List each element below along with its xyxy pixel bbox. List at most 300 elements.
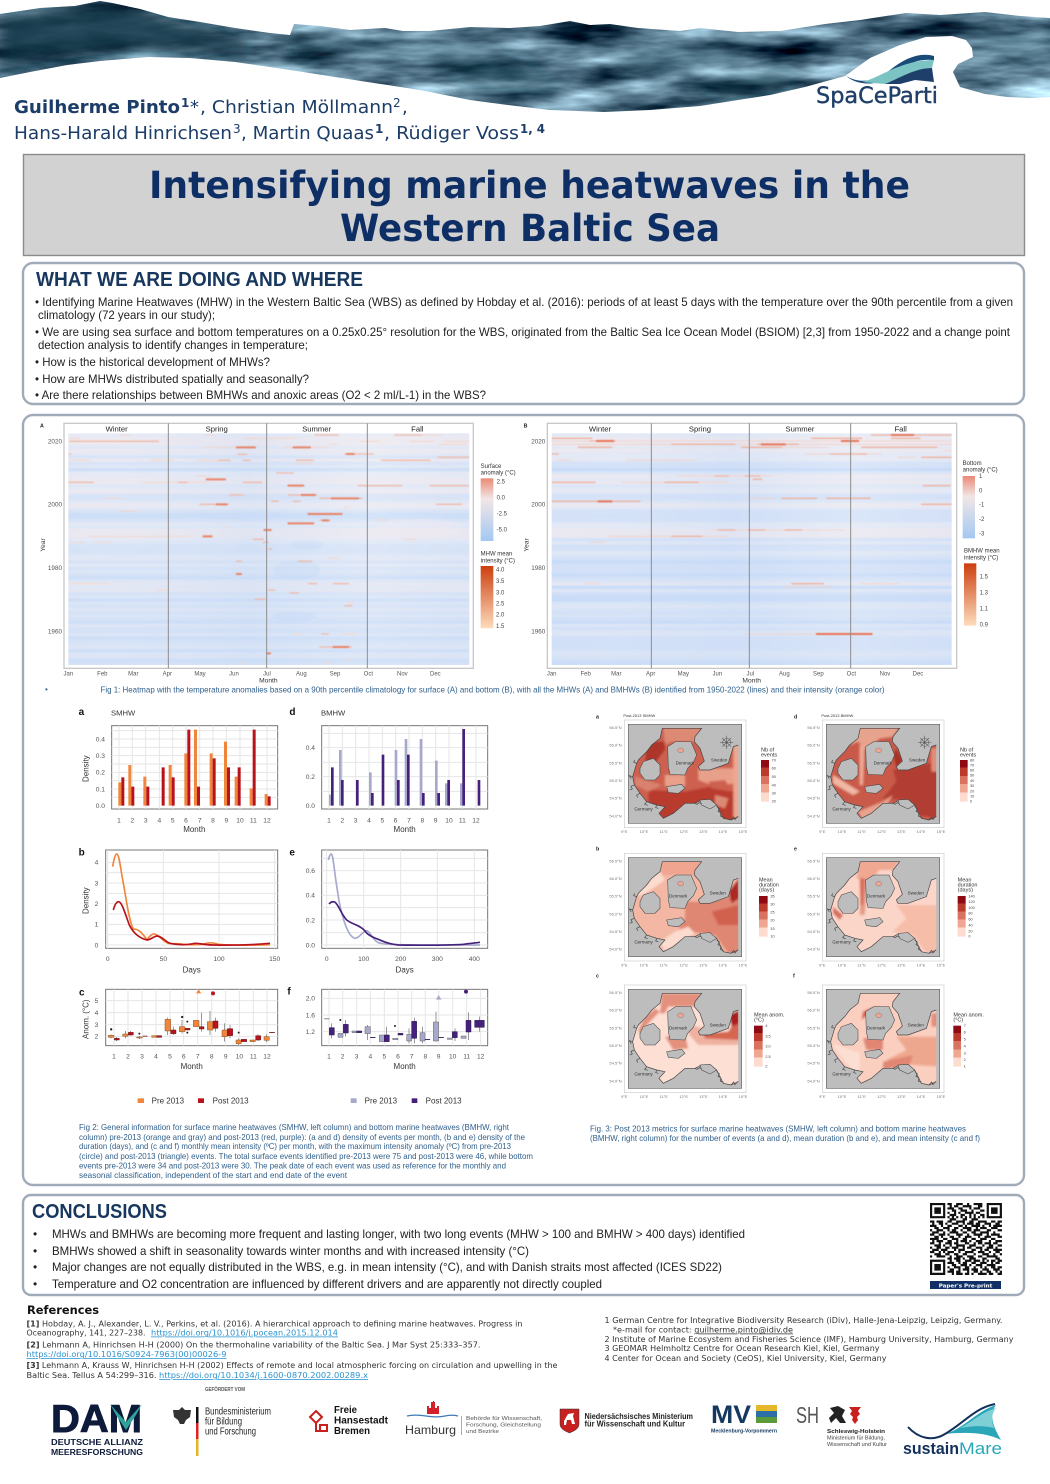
- chart d: BMHW monthly density: 12: [472, 817, 480, 824]
- chart e: BMHW duration density: e: [289, 847, 295, 858]
- map f: BMHW mean anomaly: 13°E: [897, 1094, 906, 1099]
- authors: [14, 96, 545, 144]
- chart e: BMHW duration density: 200: [395, 956, 407, 963]
- map a: SMHW number of events: 70: [772, 758, 776, 762]
- logo: Schleswig-Holstein: Ministerium für Bildung,: [827, 1436, 885, 1442]
- map f: BMHW mean anomaly: 4: [964, 1044, 967, 1048]
- chart b: SMHW duration density: 50: [160, 956, 167, 963]
- map b: SMHW mean duration: 56.0°N: [609, 876, 622, 881]
- chart a: SMHW monthly density: 5: [171, 817, 175, 824]
- chart a: SMHW monthly density: a: [79, 707, 85, 718]
- map f: BMHW mean anomaly: 10°E: [838, 1094, 847, 1099]
- logo: Niedersachsen: für Wissenschaft und Kultur: [584, 1418, 686, 1428]
- chart c: SMHW intensity boxplot: Month: [181, 1062, 203, 1071]
- heatmap B: bottom: Oct: [847, 671, 856, 677]
- heading: conclusions: CONCLUSIONS: [32, 1201, 167, 1223]
- map c: SMHW mean anomaly: [596, 973, 785, 1099]
- legend: surface anomaly: anomaly (°C): [481, 471, 516, 477]
- chart f: BMHW intensity boxplot: Month: [394, 1062, 416, 1071]
- legend: SMHW periods: Pre 2013: [152, 1096, 185, 1105]
- chart f: BMHW intensity boxplot: 10: [449, 1053, 457, 1060]
- text block: conclusions list: BMHWs showed a shift in seasonality towards winter months and with increased intensity (°C): [52, 1244, 529, 1258]
- heatmap A: surface: 2020: [48, 438, 62, 445]
- text block: aims: [35, 295, 1013, 402]
- chart d: BMHW monthly density: 8: [420, 817, 424, 824]
- logo: Niedersachsen: Niedersächsisches Ministerium: [584, 1411, 693, 1421]
- chart a: SMHW monthly density: 0.4: [96, 736, 105, 743]
- text block: conclusions list: •: [33, 1277, 37, 1291]
- references: References: [27, 1303, 99, 1317]
- map b: SMHW mean duration: 56.5°N: [609, 858, 622, 863]
- authors: , Rüdiger Voss: [384, 123, 519, 144]
- heatmap B: bottom: Jun: [713, 671, 722, 677]
- legend: bottom anomaly: 1: [979, 474, 983, 480]
- map e: BMHW mean duration: 56.5°N: [807, 858, 820, 863]
- heatmap B: bottom: Mar: [611, 671, 621, 677]
- logo: SpaCeParti: [816, 55, 938, 109]
- chart c: SMHW intensity boxplot: 4: [95, 1010, 99, 1017]
- affiliations: [604, 1316, 1014, 1363]
- chart e: BMHW duration density: 0.2: [306, 917, 315, 924]
- map c: SMHW mean anomaly: 3.5: [765, 1035, 771, 1039]
- map d: BMHW number of events: 80: [970, 758, 974, 762]
- heatmap B: bottom: Winter: [589, 424, 612, 433]
- affiliations: 3 GEOMAR Helmholtz Centre for Ocean Research Kiel, Kiel, Germany: [604, 1344, 880, 1353]
- map b: SMHW mean duration: 10: [770, 935, 775, 939]
- heatmap A: surface: Sep: [330, 671, 341, 677]
- QR code: [930, 1203, 1002, 1275]
- heatmap A: surface: Summer: [302, 424, 332, 433]
- authors: , Martin Quaas: [241, 123, 374, 144]
- authors: , Christian Möllmann: [200, 97, 393, 118]
- chart f: BMHW intensity boxplot: 1.6: [306, 1012, 315, 1019]
- heatmap A: surface: Apr: [163, 671, 172, 677]
- chart e: BMHW duration density: 100: [358, 956, 370, 963]
- map b: SMHW mean duration: 12°E: [679, 962, 688, 967]
- map f: BMHW mean anomaly: 5: [964, 1038, 966, 1042]
- map b: SMHW mean duration: duration: [759, 882, 779, 888]
- map b: SMHW mean duration: 55.0°N: [609, 911, 622, 916]
- legend: BMHW mean intensity: 1.3: [980, 590, 989, 596]
- chart d: BMHW monthly density: 10: [445, 817, 453, 824]
- map a: SMHW number of events: 15°E: [739, 829, 748, 834]
- map b: SMHW mean duration: b: [596, 847, 600, 853]
- heatmap A: surface: [40, 423, 516, 685]
- map a: SMHW number of events: Nb of: [761, 747, 775, 753]
- chart d: BMHW monthly density: 2: [340, 817, 344, 824]
- map d: BMHW number of events: 40: [970, 779, 974, 783]
- map f: BMHW mean anomaly: 7: [964, 1024, 966, 1028]
- map b: SMHW mean duration: 10°E: [640, 962, 649, 967]
- map b: SMHW mean duration: 54.5°N: [609, 929, 622, 934]
- chart b: SMHW duration density: Days: [183, 965, 201, 974]
- chart f: BMHW intensity boxplot: 11: [463, 1053, 470, 1060]
- map f: BMHW mean anomaly: 14°E: [917, 1094, 926, 1099]
- heatmap A: surface: 1960: [48, 628, 62, 635]
- references: Oceanography, 141, 227–238.: [26, 1328, 146, 1338]
- map e: BMHW mean duration: (days): [958, 887, 973, 893]
- map e: BMHW mean duration: 11°E: [857, 962, 866, 967]
- map b: SMHW mean duration: 9°E: [621, 962, 628, 967]
- logo: Bundesministerium: [173, 1406, 271, 1456]
- chart f: BMHW intensity boxplot: 9: [437, 1053, 441, 1060]
- logo: sustainMare: sustain: [903, 1439, 959, 1458]
- map d: BMHW number of events: 20: [970, 789, 974, 793]
- logo: Freie Hansestadt Bremen: Hansestadt: [334, 1414, 388, 1426]
- legend: BMHW mean intensity: BMHW mean: [964, 549, 1000, 555]
- map e: BMHW mean duration: 100: [968, 906, 975, 910]
- logo: Schleswig-Holstein: Wissenschaft und Kultur: [827, 1442, 887, 1448]
- authors: Hans-Harald Hinrichsen: [14, 123, 232, 144]
- logo: sustainMare: [903, 1404, 1002, 1458]
- map b: SMHW mean duration: (days): [759, 887, 774, 893]
- map b: SMHW mean duration: Sweden: [710, 891, 726, 896]
- logo: Schleswig-Holstein: Schleswig-Holstein: [827, 1429, 885, 1435]
- map f: BMHW mean anomaly: Denmark: [867, 1025, 886, 1030]
- legend: SMHW periods: Post 2013: [213, 1096, 249, 1105]
- chart a: SMHW monthly density: 10: [236, 817, 244, 824]
- map b: SMHW mean duration: 14°E: [719, 962, 728, 967]
- logo: Hamburg: [405, 1401, 542, 1437]
- heatmap B: bottom: May: [678, 671, 689, 677]
- chart d: BMHW monthly density: 4: [367, 817, 371, 824]
- legend: BMHW mean intensity: 0.9: [980, 622, 989, 628]
- chart a: SMHW monthly density: 0.2: [96, 770, 105, 777]
- references: https://doi.org/10.1016/j.pocean.2015.12.014: [151, 1328, 338, 1338]
- heatmap A: surface: Nov: [397, 671, 408, 677]
- map e: BMHW mean duration: [794, 847, 977, 967]
- chart a: SMHW monthly density: 4: [157, 817, 161, 824]
- chart c: SMHW intensity boxplot: 7: [196, 1053, 200, 1060]
- map b: SMHW mean duration: 15°E: [739, 962, 748, 967]
- heatmap B: bottom: Apr: [646, 671, 655, 677]
- heatmap A: surface: 1980: [48, 565, 62, 572]
- map a: SMHW number of events: 40: [772, 783, 776, 787]
- map f: BMHW mean anomaly: 15°E: [937, 1094, 946, 1099]
- heatmap A: surface: Oct: [364, 671, 373, 677]
- map a: SMHW number of events: 55.0°N: [609, 778, 622, 783]
- map e: BMHW mean duration: Sweden: [908, 891, 924, 896]
- text block: conclusions list: MHWs and BMHWs are becoming more frequent and lasting longer, with two long events (MHW > 100 and BMHW > 400 days) identified: [52, 1227, 745, 1241]
- map a: SMHW number of events: Post-2013 SMHW: [623, 713, 655, 718]
- map f: BMHW mean anomaly: 6: [964, 1031, 966, 1035]
- logo: SpaCeParti: SpaCeParti: [816, 84, 938, 109]
- panel: what we are doing and where: [23, 263, 1024, 404]
- chart d: BMHW monthly density: 6: [394, 817, 398, 824]
- chart b: SMHW duration density: 100: [213, 956, 225, 963]
- references: https://doi.org/10.1034/j.1600-0870.2002.00289.x: [159, 1371, 369, 1380]
- MHW event streaks: [68, 435, 470, 663]
- chart a: SMHW monthly density: 0.3: [96, 753, 105, 760]
- heatmap A: surface: May: [194, 671, 206, 677]
- map f: BMHW mean anomaly: 11°E: [857, 1094, 866, 1099]
- map b: SMHW mean duration: 25: [770, 911, 775, 915]
- map a: SMHW number of events: a: [596, 714, 599, 720]
- logo: DAM: MEERESFORSCHUNG: [51, 1447, 143, 1457]
- map a: SMHW number of events: [596, 713, 777, 834]
- chart c: SMHW intensity boxplot: 2: [95, 1034, 99, 1041]
- chart d: BMHW monthly density: 9: [434, 817, 438, 824]
- chart c: SMHW intensity boxplot: 1: [112, 1053, 116, 1060]
- heatmap B: bottom: 1960: [531, 628, 546, 635]
- chart b: SMHW duration density: 2: [95, 901, 99, 908]
- map e: BMHW mean duration: 140: [968, 894, 975, 898]
- text block: aims: • We are using sea surface and bottom temperatures on a 0.25x0.25° resolution for the WBS, originated from the Baltic Sea Ice Ocean Model (BSIOM) [2,3] from 1950-2022 and a change point: [35, 325, 1011, 339]
- chart f: BMHW intensity boxplot: 2: [341, 1053, 345, 1060]
- map d: BMHW number of events: 70: [970, 763, 974, 767]
- references: https://doi.org/10.1016/S0924-7963(00)00026-9: [26, 1350, 227, 1359]
- legend: surface anomaly: 0.0: [497, 496, 506, 502]
- heatmap B: bottom: Month: [742, 678, 761, 685]
- heatmap A: surface: 2000: [48, 502, 62, 509]
- chart a: SMHW monthly density: SMHW: [111, 708, 136, 717]
- chart d: BMHW monthly density: BMHW: [321, 708, 346, 717]
- map e: BMHW mean duration: 13°E: [897, 962, 906, 967]
- chart a: SMHW monthly density: 8: [211, 817, 215, 824]
- map e: BMHW mean duration: 56.0°N: [807, 876, 820, 881]
- chart b: SMHW duration density: 4: [95, 860, 99, 867]
- authors: ,: [402, 97, 408, 118]
- legend: bottom anomaly: -2: [979, 517, 985, 523]
- map b: SMHW mean duration: 15: [770, 927, 775, 931]
- figure 2 caption: [79, 1123, 533, 1180]
- legend: BMHW mean intensity: intensity (°C): [964, 556, 998, 562]
- chart f: BMHW intensity boxplot: 7: [410, 1053, 414, 1060]
- heatmap A: surface: Jul: [263, 671, 271, 677]
- chart b: SMHW duration density: 1: [95, 922, 99, 929]
- chart a: SMHW monthly density: 6: [184, 817, 188, 824]
- map a: SMHW number of events: 56.0°N: [609, 743, 622, 748]
- map a: SMHW number of events: events: [761, 752, 777, 758]
- legend: BMHW periods: [351, 1096, 462, 1105]
- map e: BMHW mean duration: Germany: [832, 940, 852, 945]
- logo: Schleswig-Holstein: [796, 1402, 887, 1448]
- map f: BMHW mean anomaly: (°C): [953, 1017, 963, 1023]
- chart f: BMHW intensity boxplot: 6: [396, 1053, 400, 1060]
- header wave image: [0, 0, 1050, 115]
- map f: BMHW mean anomaly: 54.0°N: [807, 1078, 820, 1083]
- map d: BMHW number of events: 30: [970, 784, 974, 788]
- map a: SMHW number of events: 54.5°N: [609, 796, 622, 801]
- figure 2 caption: Fig 2: General information for surface marine heatwaves (SMHW, left column) and bottom marine heatwaves (BMHW, right: [79, 1123, 510, 1132]
- logo: Schleswig-Holstein: SH: [796, 1402, 819, 1428]
- map c: SMHW mean anomaly: (°C): [754, 1017, 764, 1023]
- authors: 1: [181, 96, 189, 110]
- chart b: SMHW duration density: 0: [106, 956, 110, 963]
- chart f: BMHW intensity boxplot: 8: [423, 1053, 427, 1060]
- map c: SMHW mean anomaly: 10°E: [640, 1094, 649, 1099]
- figure 2 caption: duration (days), and (c and f) monthly mean intensity (ºC) per month, with the maximum intensity anomaly (ºC) from pre-2013: [79, 1142, 511, 1151]
- chart e: BMHW duration density: 300: [432, 956, 443, 963]
- logo: Bundesministerium: und Forschung: [205, 1426, 256, 1438]
- chart a: SMHW monthly density: 1: [117, 817, 121, 824]
- map e: BMHW mean duration: 14°E: [917, 962, 926, 967]
- logo: Bundesministerium: für Bildung: [205, 1416, 242, 1428]
- map a: SMHW number of events: 20: [772, 800, 776, 804]
- map c: SMHW mean anomaly: Mean anom.: [754, 1012, 785, 1018]
- chart c: SMHW intensity boxplot: 3: [140, 1053, 144, 1060]
- chart f: BMHW intensity boxplot: 12: [477, 1053, 485, 1060]
- heatmap B: bottom: Spring: [689, 424, 711, 433]
- legend: BMHW periods: Post 2013: [426, 1096, 462, 1105]
- map d: BMHW number of events: 54.5°N: [807, 796, 820, 801]
- heatmap B: bottom: Feb: [581, 671, 591, 677]
- map c: SMHW mean anomaly: 2: [765, 1065, 767, 1069]
- map c: SMHW mean anomaly: 55.5°N: [609, 1025, 622, 1030]
- map c: SMHW mean anomaly: Germany: [634, 1071, 654, 1076]
- button: paper's pre-print: [930, 1281, 1001, 1289]
- logo: Freie Hansestadt Bremen: Freie: [334, 1404, 357, 1416]
- figure 2 caption: seasonal classification, independent of the start and end date of the event: [79, 1171, 348, 1180]
- chart c: SMHW intensity boxplot: 2: [126, 1053, 130, 1060]
- map d: BMHW number of events: 15°E: [937, 829, 946, 834]
- map c: SMHW mean anomaly: 4: [765, 1024, 768, 1028]
- text block: aims: • Are there relationships between BMHWs and anoxic areas (O2 < 2 ml/L-1) in the WBS?: [35, 388, 486, 402]
- map e: BMHW mean duration: 10°E: [838, 962, 847, 967]
- map d: BMHW number of events: 13°E: [897, 829, 906, 834]
- chart b: SMHW duration density: 0: [95, 942, 99, 949]
- legend: BMHW periods: Pre 2013: [365, 1096, 398, 1105]
- legend: surface anomaly: 2.5: [497, 480, 506, 486]
- legend: MHW mean intensity: intensity (°C): [481, 558, 515, 564]
- heading: what we are doing: WHAT WE ARE DOING AND WHERE: [36, 269, 363, 291]
- map c: SMHW mean anomaly: 13°E: [699, 1094, 708, 1099]
- chart e: BMHW duration density: 0.4: [306, 893, 315, 900]
- map e: BMHW mean duration: 54.0°N: [807, 947, 820, 952]
- map f: BMHW mean anomaly: 12°E: [877, 1094, 886, 1099]
- chart a: SMHW monthly density: Month: [183, 825, 205, 834]
- legend: MHW mean intensity: 1.5: [496, 624, 505, 630]
- references: [3] Lehmann A, Krauss W, Hinrichsen H-H (2002) Effects of remote and local atmospheric forcing on circulation and upwelling in the: [26, 1361, 558, 1370]
- chart b: SMHW duration density: Density: [82, 887, 91, 914]
- affiliations: 1 German Centre for Integrative Biodiversity Research (iDiv), Halle-Jena-Leipzig, Leipzig, Germany.: [604, 1316, 1002, 1325]
- map e: BMHW mean duration: duration: [958, 882, 977, 888]
- map b: SMHW mean duration: [596, 847, 779, 967]
- map c: SMHW mean anomaly: 55.0°N: [609, 1043, 622, 1048]
- chart b: SMHW duration density: 3: [95, 880, 99, 887]
- heatmap A: surface: Winter: [106, 424, 128, 433]
- chart d: BMHW monthly density: 5: [380, 817, 384, 824]
- heatmap A: surface: Month: [259, 678, 278, 685]
- map a: SMHW number of events: 30: [772, 792, 776, 796]
- text block: conclusions list: [33, 1227, 745, 1291]
- chart d: BMHW monthly density: 0.0: [306, 803, 315, 810]
- button: paper's pre-print: Paper's Pre-print: [939, 1283, 993, 1289]
- map e: BMHW mean duration: e: [794, 847, 797, 853]
- map d: BMHW number of events: 12°E: [877, 829, 886, 834]
- figure 3 caption: (BMHW, right column) for the number of events (a and d), mean duration (b and e), and mean intensity (c and f): [590, 1134, 980, 1143]
- text block: aims: detection analysis to identify changes in temperature;: [38, 338, 308, 352]
- map a: SMHW number of events: Denmark: [676, 760, 695, 765]
- heatmap A: surface: Year: [40, 537, 47, 552]
- map e: BMHW mean duration: 40: [968, 923, 973, 927]
- chart f: BMHW intensity boxplot: 1.2: [306, 1029, 315, 1036]
- title box: Intensifying marine heatwaves in the: [149, 164, 910, 207]
- map f: BMHW mean anomaly: 55.5°N: [807, 1025, 820, 1030]
- text block: conclusions list: Major changes are not equally distributed in the WBS, e.g. in mean intensity (°C), and with Danish straits most affected (ICES SD22): [52, 1260, 722, 1274]
- panel: conclusions: [23, 1195, 1024, 1295]
- legend: surface anomaly: -2.5: [497, 511, 508, 517]
- heatmap A: surface: Jan: [64, 671, 73, 677]
- chart d: BMHW monthly density: [289, 707, 488, 834]
- heatmap A: surface: Feb: [97, 671, 108, 677]
- text block: aims: • How is the historical development of MHWs?: [35, 355, 270, 369]
- legend: bottom anomaly: anomaly (°C): [963, 468, 998, 474]
- chart f: BMHW intensity boxplot: f: [287, 986, 291, 997]
- figure 1 caption: Fig 1: Heatmap with the temperature anomalies based on a 90th percentile climatology for surface (A) and bottom (B), with all the MHWs (A) and BMHWs (B) identified from 1950-2022 (lines) and their intensity (orange color): [100, 686, 885, 694]
- map f: BMHW mean anomaly: Mean anom.: [953, 1012, 984, 1018]
- figure 2 caption: column) pre-2013 (orange and gray) and post-2013 (red, purple): (a and d) density of events per month, (b and e) density of the: [79, 1133, 525, 1142]
- chart d: BMHW monthly density: 0.2: [306, 774, 315, 781]
- chart d: BMHW monthly density: 7: [407, 817, 411, 824]
- map b: SMHW mean duration: 35: [770, 894, 775, 898]
- figure 1 caption: •: [45, 685, 48, 694]
- figure 2: intensity boxplots: [79, 986, 488, 1105]
- map e: BMHW mean duration: 80: [968, 912, 973, 916]
- map e: BMHW mean duration: 12°E: [877, 962, 886, 967]
- legend: MHW mean intensity: 2.5: [496, 602, 505, 608]
- logo: Hamburg: Behörde für Wissenschaft,: [466, 1416, 542, 1422]
- map b: SMHW mean duration: 11°E: [659, 962, 668, 967]
- heatmap B: bottom: Dec: [913, 671, 923, 677]
- heatmap B: bottom: 2020: [531, 438, 546, 445]
- heatmap A: surface: Jun: [229, 671, 239, 677]
- heatmap B: bottom: Nov: [880, 671, 890, 677]
- legend: MHW mean intensity: 3.0: [496, 590, 505, 596]
- map f: BMHW mean anomaly: 2: [964, 1058, 966, 1062]
- map b: SMHW mean duration: Mean: [759, 877, 773, 883]
- map d: BMHW number of events: 56.5°N: [807, 725, 820, 730]
- chart e: BMHW duration density: 0.6: [306, 868, 315, 875]
- panel: results: [23, 415, 1024, 1185]
- chart c: SMHW intensity boxplot: Anom. (°C): [82, 999, 91, 1039]
- map a: SMHW number of events: 56.5°N: [609, 725, 622, 730]
- chart d: BMHW monthly density: 1: [327, 817, 331, 824]
- figure 2: density and duration charts: [79, 707, 488, 974]
- affiliations: 2 Institute of Marine Ecosystem and Fisheries Science (IMF), Hamburg University, Hamburg, Germany: [604, 1335, 1014, 1344]
- map c: SMHW mean anomaly: 11°E: [659, 1094, 668, 1099]
- chart b: SMHW duration density: [79, 847, 281, 974]
- legend: bottom anomaly: -3: [979, 531, 985, 537]
- figure 3 caption: Fig. 3: Post 2013 metrics for surface marine heatwaves (SMHW, left column) and bottom marine heatwaves: [590, 1124, 966, 1134]
- heatmap A: surface: Spring: [206, 424, 228, 433]
- text block: conclusions list: •: [33, 1244, 37, 1258]
- map a: SMHW number of events: 14°E: [719, 829, 728, 834]
- logo: Hamburg: und Bezirke: [466, 1429, 499, 1435]
- map a: SMHW number of events: 60: [772, 767, 776, 771]
- map b: SMHW mean duration: 13°E: [699, 962, 708, 967]
- map d: BMHW number of events: Post-2013 BMHW: [821, 713, 853, 718]
- map b: SMHW mean duration: 20: [770, 919, 775, 923]
- map c: SMHW mean anomaly: 14°E: [719, 1094, 728, 1099]
- text block: aims: • Identifying Marine Heatwaves (MHW) in the Western Baltic Sea (WBS) as defined by Hobday et al. (2016): periods of at least 5 days with the temperature over the 90th percentile from a given: [35, 295, 1013, 309]
- map b: SMHW mean duration: 55.5°N: [609, 894, 622, 899]
- chart a: SMHW monthly density: [79, 707, 278, 834]
- chart f: BMHW intensity boxplot: 5: [382, 1053, 386, 1060]
- BMHW event streaks: [552, 435, 952, 634]
- chart c: SMHW intensity boxplot: 11: [250, 1053, 257, 1060]
- chart e: BMHW duration density: Days: [396, 965, 414, 974]
- chart e: BMHW duration density: 0.0: [306, 942, 315, 949]
- map b: SMHW mean duration: Denmark: [669, 894, 688, 899]
- map b: SMHW mean duration: 54.0°N: [609, 947, 622, 952]
- map e: BMHW mean duration: 120: [968, 900, 975, 904]
- chart a: SMHW monthly density: 7: [198, 817, 202, 824]
- map c: SMHW mean anomaly: 15°E: [739, 1094, 748, 1099]
- map c: SMHW mean anomaly: 3.0: [765, 1045, 771, 1049]
- map d: BMHW number of events: Sweden: [909, 757, 926, 762]
- heatmap B: bottom: Jan: [547, 671, 556, 677]
